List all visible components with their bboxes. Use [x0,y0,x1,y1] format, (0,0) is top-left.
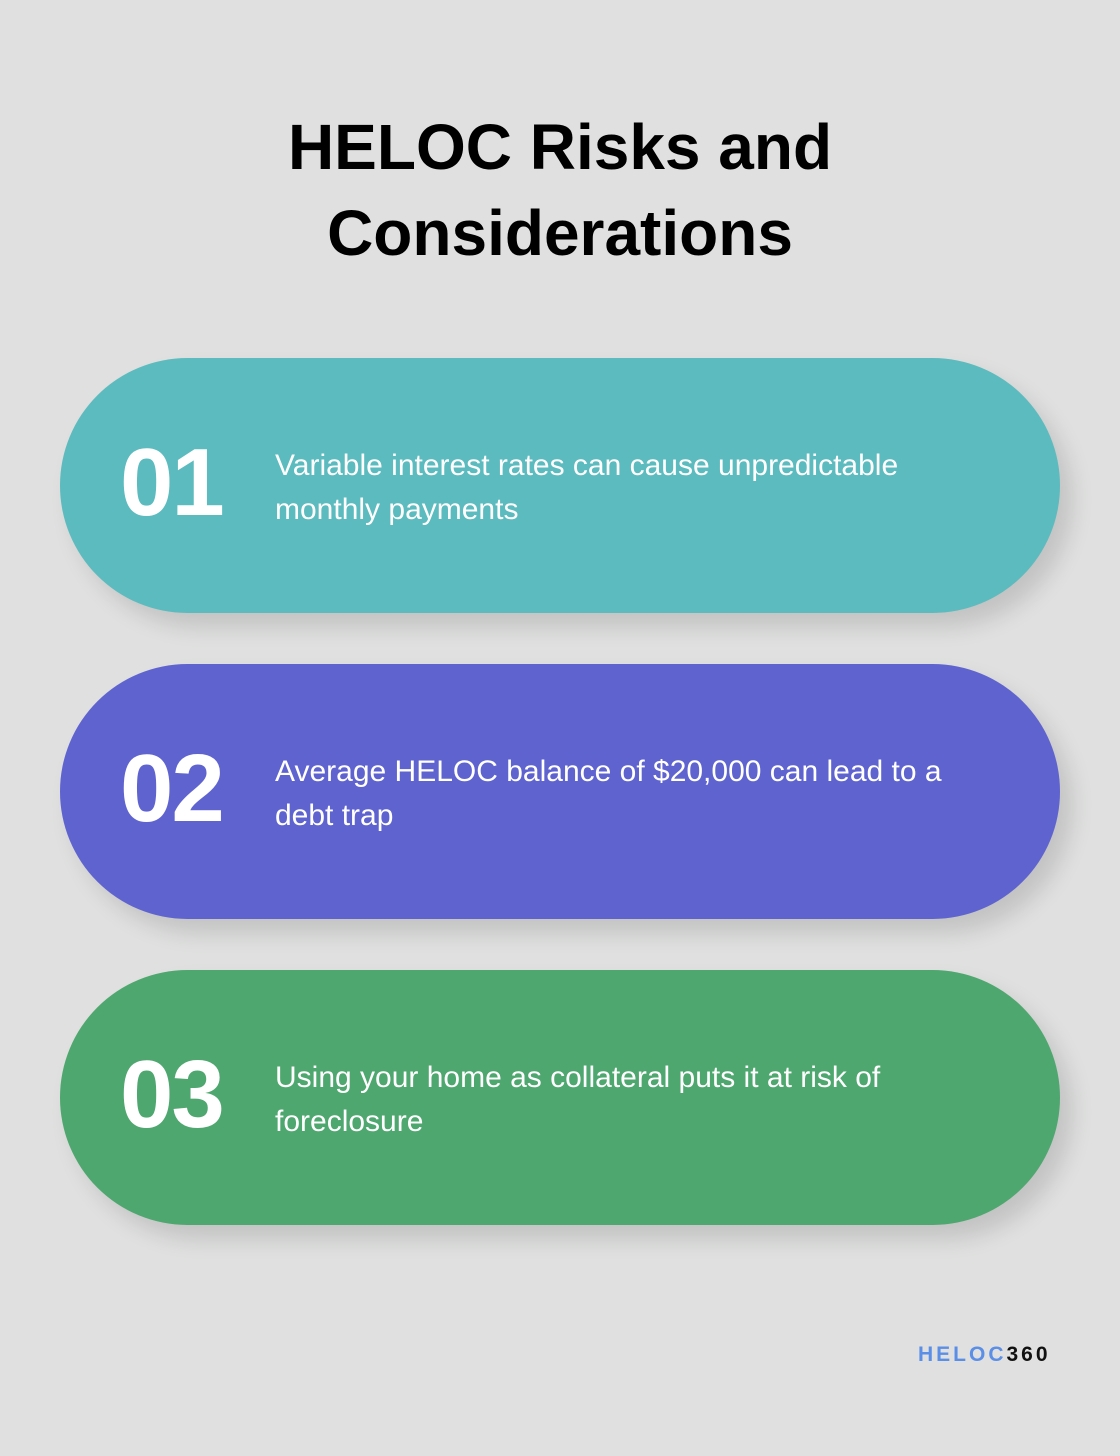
title [288,111,832,269]
text 01: monthly payments [275,493,518,526]
number 01: 01 [120,429,223,536]
text 03: foreclosure [275,1105,423,1138]
title: HELOC Risks and [288,111,832,183]
text 02 [275,755,942,832]
text 01: Variable interest rates can cause unpredictable [275,449,898,482]
text 02: debt trap [275,799,393,832]
card 03 [60,970,1060,1225]
text 02: Average HELOC balance of $20,000 can lead to a [275,755,942,788]
logo: HELOC360 [918,1343,1051,1366]
text 01 [275,449,898,526]
card 01 [60,358,1060,613]
number 03: 03 [120,1041,223,1148]
text 03: Using your home as collateral puts it at risk of [275,1061,880,1094]
card 02 [60,664,1060,919]
title: Considerations [327,197,793,269]
text 03 [275,1061,880,1138]
number 02: 02 [120,735,223,842]
